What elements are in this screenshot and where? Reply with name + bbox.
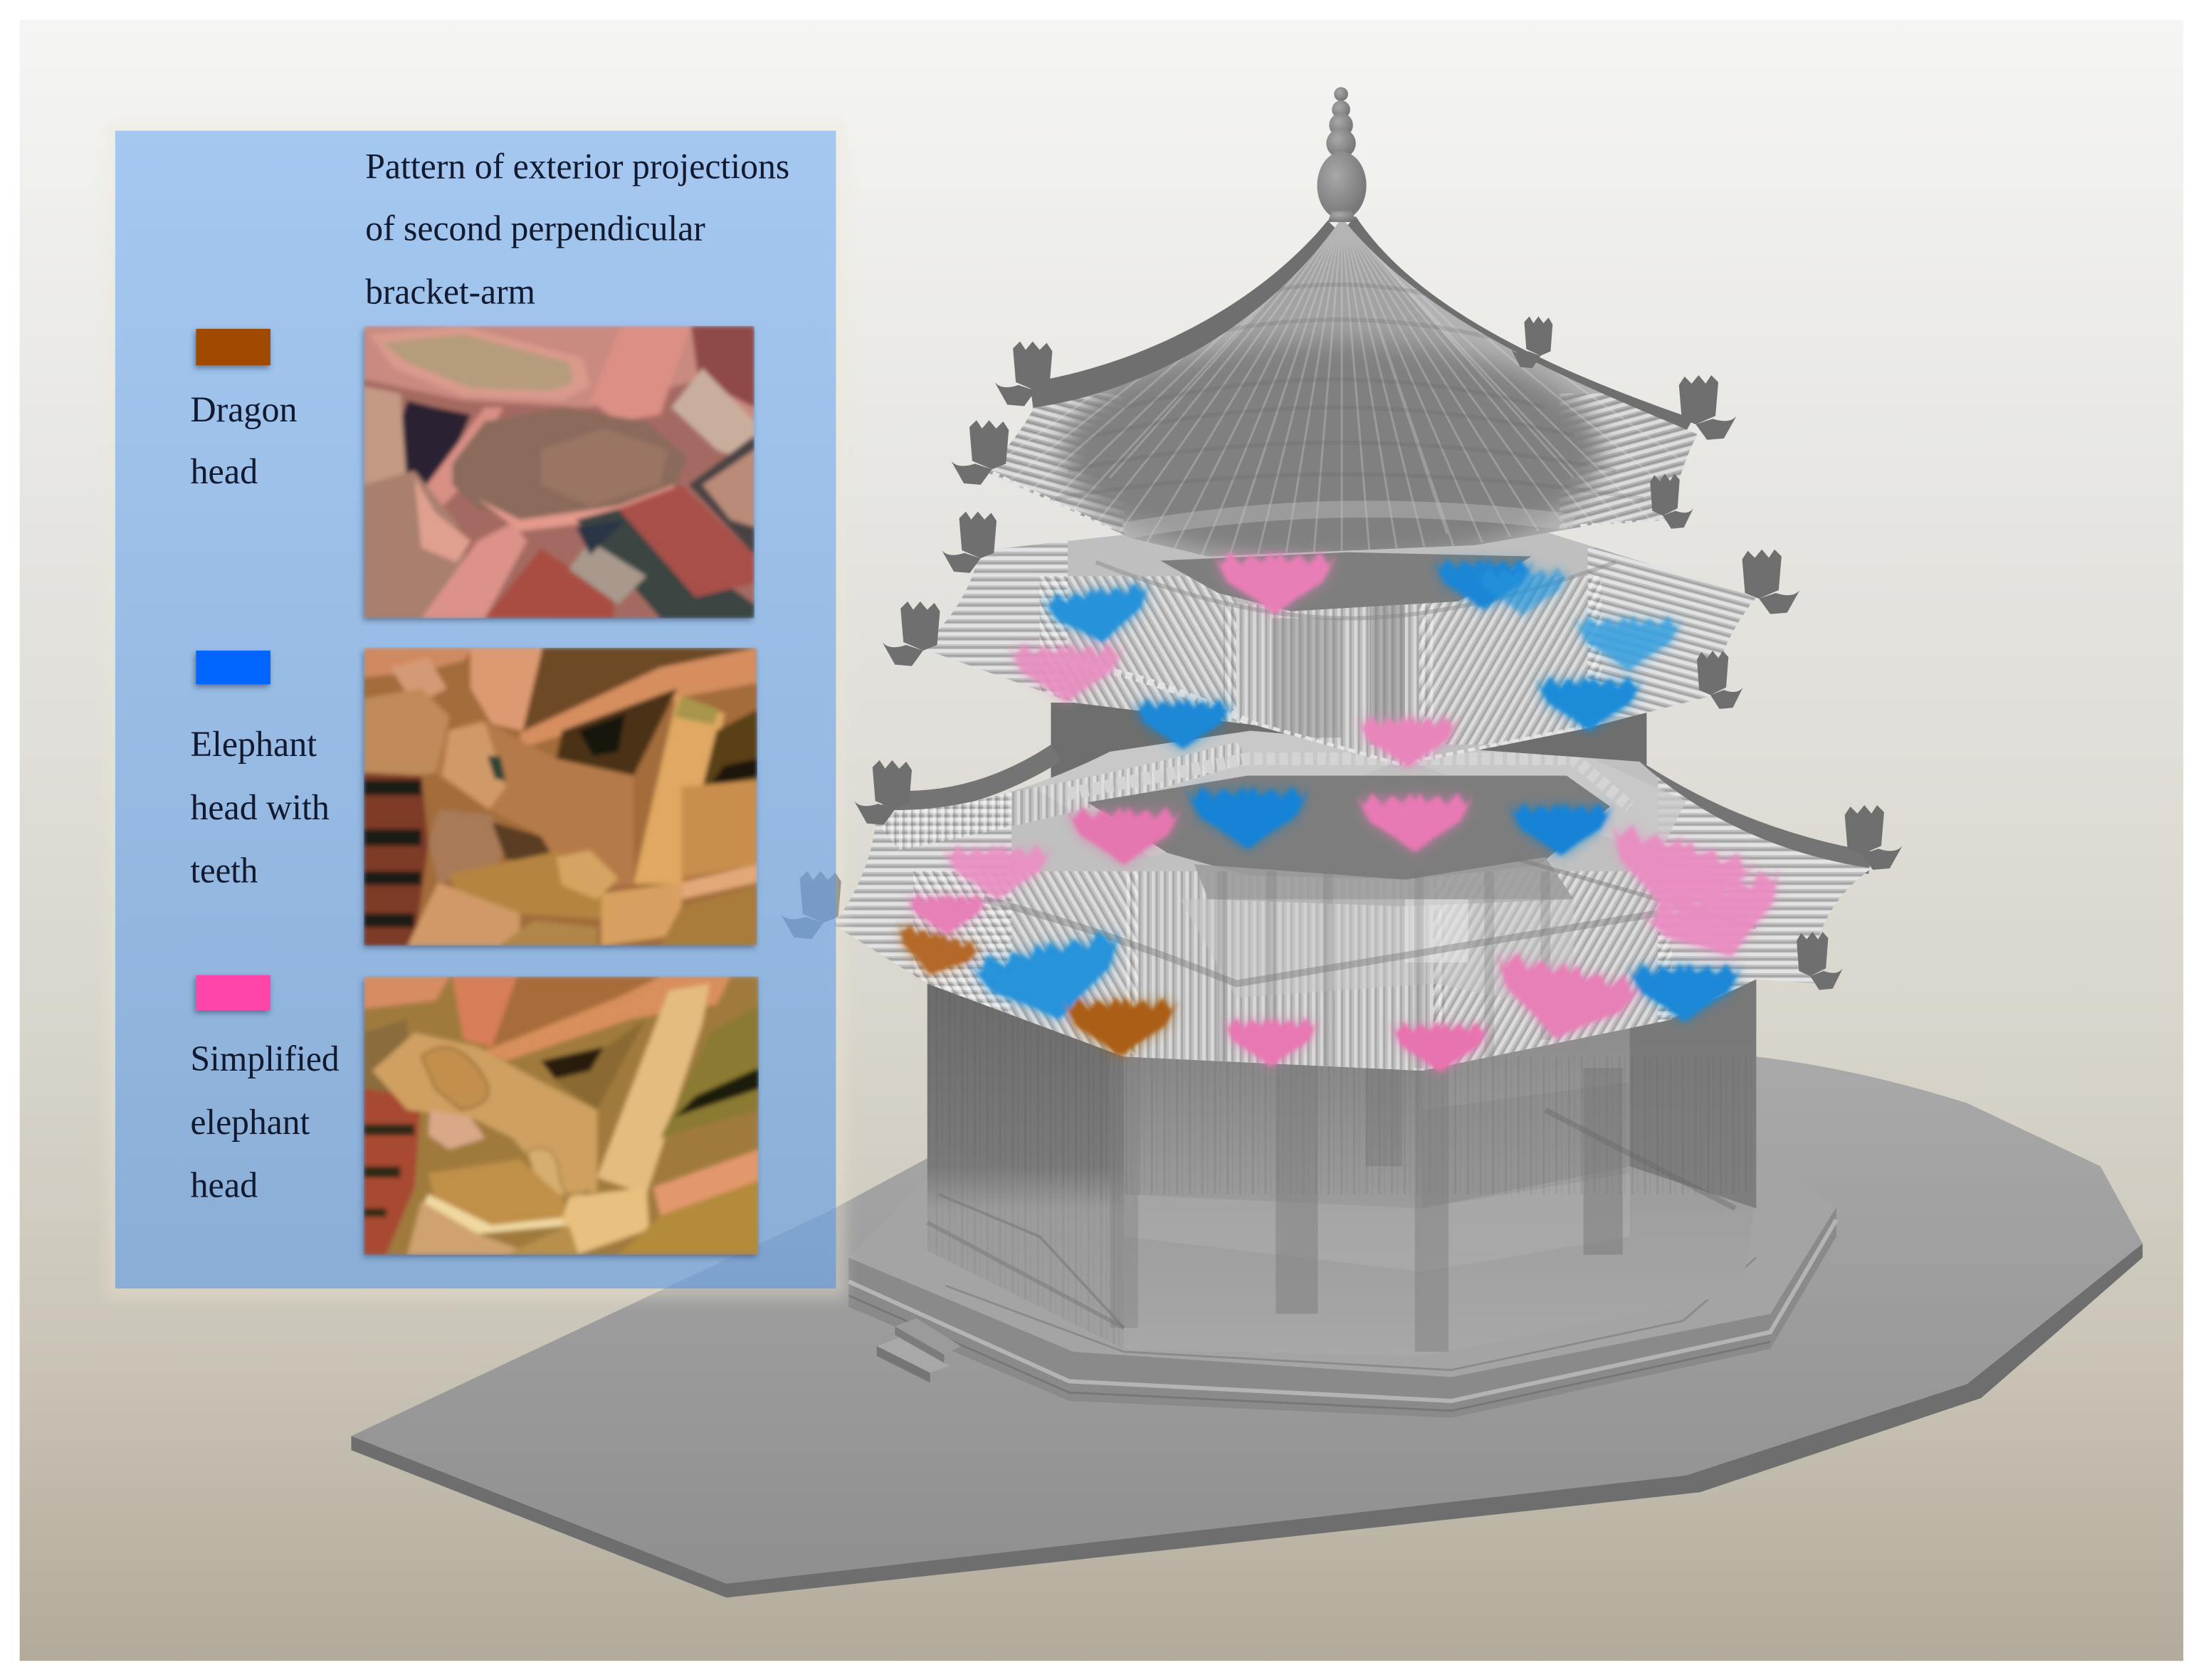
- panel: legend: [115, 131, 836, 1288]
- panel title: [365, 147, 789, 311]
- legend label: elephant head with teeth: Elephant: [190, 724, 317, 764]
- legend label: dragon head: [190, 389, 297, 491]
- legend label: simplified elephant head: head: [190, 1165, 258, 1205]
- top roof: [984, 216, 1700, 565]
- legend swatch: dragon head: [196, 329, 270, 365]
- panel title: of second perpendicular: [365, 209, 705, 248]
- legend label: simplified elephant head: [190, 1039, 340, 1205]
- ridge ornaments: [781, 317, 1903, 990]
- legend swatch: simplified elephant head: [196, 975, 270, 1010]
- ground slab: [351, 1056, 2142, 1597]
- photo: simplified elephant head bracket: [364, 977, 759, 1255]
- legend label: dragon head: Dragon: [190, 389, 297, 429]
- middle roof: [913, 530, 1763, 773]
- lower roof: [829, 730, 1876, 1075]
- ground floor walls and columns: [927, 980, 1756, 1356]
- upper storey wall: [1051, 703, 1646, 787]
- legend label: elephant head with teeth: teeth: [190, 851, 258, 891]
- legend swatch: elephant head with teeth: [196, 651, 270, 684]
- legend label: simplified elephant head: Simplified: [190, 1039, 340, 1078]
- legend label: dragon head: head: [190, 451, 258, 491]
- legend label: elephant head with teeth: head with: [190, 787, 330, 827]
- bracket projections: lower tier: [888, 787, 1801, 1072]
- photo: elephant head with teeth bracket: [364, 648, 757, 945]
- finial: [1317, 87, 1367, 222]
- panel title: bracket-arm: [365, 271, 535, 311]
- entrance steps: [877, 1318, 961, 1382]
- photo: dragon head bracket: [364, 326, 755, 619]
- legend label: simplified elephant head: elephant: [190, 1102, 310, 1142]
- bracket projections: upper tier: [1007, 552, 1683, 767]
- stone platform: [848, 1145, 1836, 1418]
- cream glow behind panel: [107, 122, 846, 1298]
- legend label: elephant head with teeth: [190, 724, 330, 891]
- panel title: Pattern of exterior projections: [365, 147, 789, 187]
- pagoda model: [781, 87, 1903, 1418]
